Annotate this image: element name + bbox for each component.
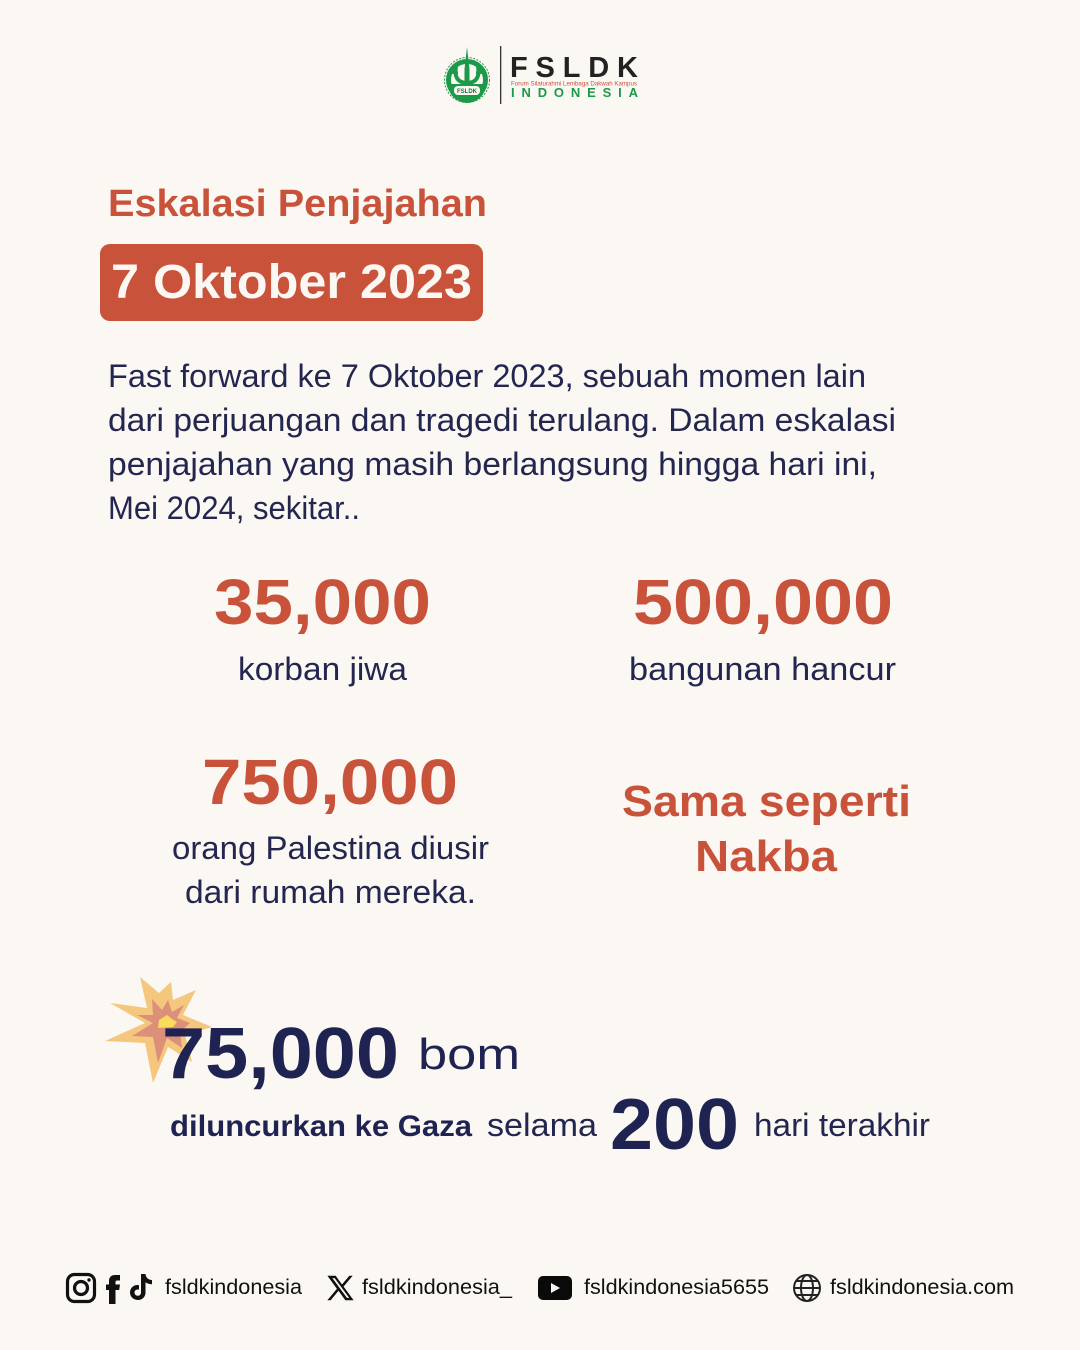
logo: FSLDK Indonesia xyxy=(444,46,639,104)
text: fsldkindonesia5655: fsldkindonesia5655 xyxy=(584,1276,769,1299)
date badge xyxy=(100,244,483,321)
icon: globe xyxy=(794,1275,820,1301)
icon: X xyxy=(328,1276,353,1300)
stat: 750,000 orang diusir: dari rumah mereka. xyxy=(185,874,476,910)
icon: instagram xyxy=(68,1274,94,1302)
logo: FSLDK Indonesia: Forum Silaturahmi Lembaga Dakwah Kampus xyxy=(511,82,637,88)
intro paragraph: dari perjuangan dan tragedi terulang. Dalam eskalasi xyxy=(108,402,896,438)
text: diluncurkan ke Gaza: diluncurkan ke Gaza xyxy=(170,1110,472,1143)
stat: 75,000 bom: 75,000 xyxy=(162,1014,399,1094)
callout: Sama seperti Nakba: Sama seperti xyxy=(622,777,911,826)
icon: explosion xyxy=(105,977,212,1083)
intro paragraph xyxy=(108,358,896,526)
stat: 35,000 korban jiwa: 35,000 xyxy=(214,566,431,638)
icon: facebook xyxy=(106,1275,120,1304)
icon: green crest xyxy=(444,47,490,103)
text: fsldkindonesia: fsldkindonesia xyxy=(165,1276,302,1299)
stat: 35,000 korban jiwa: korban jiwa xyxy=(238,651,407,687)
stat: 35,000 korban jiwa xyxy=(214,566,431,687)
stat: 750,000 orang diusir xyxy=(172,746,489,910)
stat: 200: 200 xyxy=(610,1085,739,1165)
heading: Eskalasi Penjajahan: Eskalasi Penjajahan xyxy=(108,183,487,225)
callout: Sama seperti Nakba: Nakba xyxy=(695,832,838,881)
icon: green crest: FSLDK xyxy=(457,89,478,95)
intro paragraph: penjajahan yang masih berlangsung hingga hari ini, xyxy=(108,446,877,482)
logo: FSLDK Indonesia: INDONESIA xyxy=(511,85,639,100)
intro paragraph: Fast forward ke 7 Oktober 2023, sebuah momen lain xyxy=(108,358,866,394)
stat: 75,000 bom: bom xyxy=(418,1030,520,1079)
stat: 750,000 orang diusir: orang Palestina diusir xyxy=(172,830,489,866)
text: hari terakhir: hari terakhir xyxy=(754,1107,930,1143)
text: fsldkindonesia.com: fsldkindonesia.com xyxy=(830,1276,1014,1299)
date badge: 7 Oktober 2023 xyxy=(111,256,472,309)
icon: tiktok xyxy=(130,1274,152,1300)
stat: 500,000 bangunan hancur: 500,000 xyxy=(633,566,893,638)
logo: FSLDK Indonesia: FSLDK xyxy=(510,52,638,84)
stat: 500,000 bangunan hancur xyxy=(629,566,896,687)
icon: youtube xyxy=(538,1276,572,1300)
footer: social links xyxy=(68,1274,1014,1304)
stat: 750,000 orang diusir: 750,000 xyxy=(202,746,458,818)
stat: 75,000 bom xyxy=(162,1014,520,1094)
intro paragraph: Mei 2024, sekitar.. xyxy=(108,490,360,526)
text: selama: selama xyxy=(487,1107,597,1143)
callout: Sama seperti Nakba xyxy=(622,777,911,881)
text: fsldkindonesia_: fsldkindonesia_ xyxy=(362,1276,512,1299)
stat: 500,000 bangunan hancur: bangunan hancur xyxy=(629,651,896,687)
